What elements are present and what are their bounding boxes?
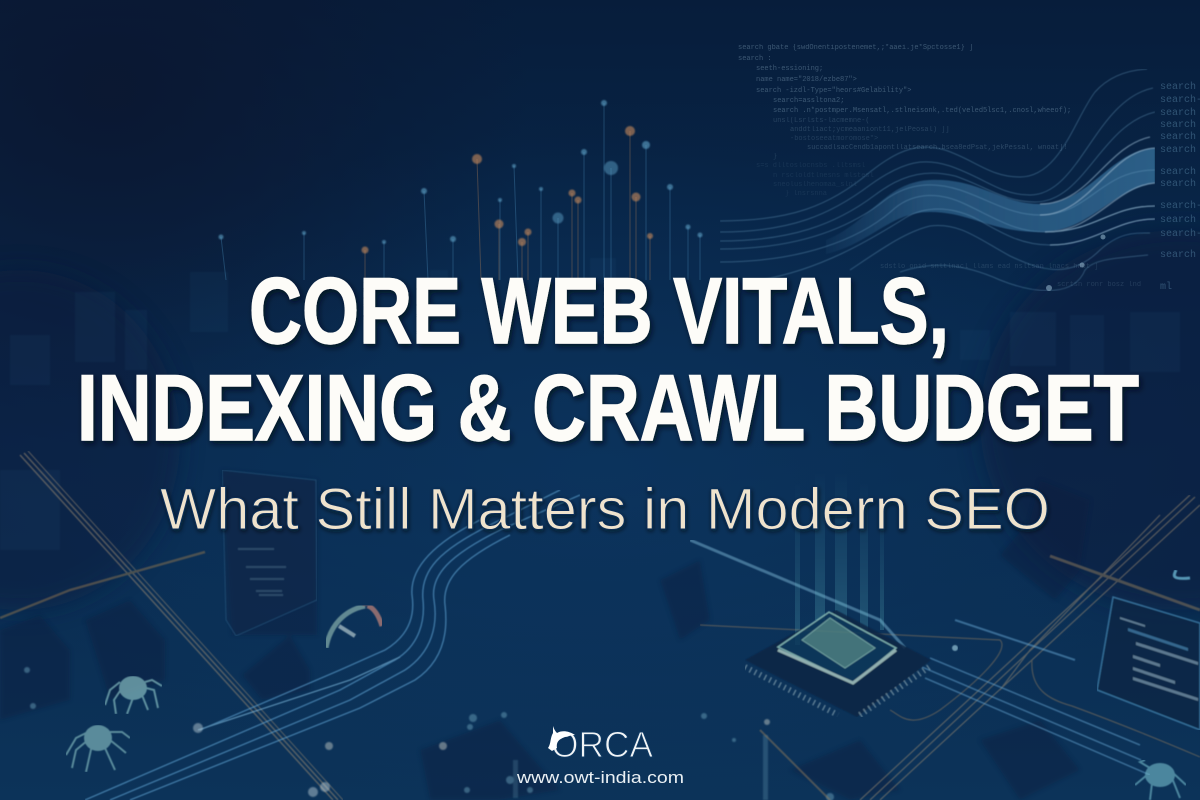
bright stream edges (1040, 137, 1155, 245)
right spider icon (1135, 760, 1186, 800)
code snippet: name name="2018/ezbe87"> (756, 76, 857, 84)
code snippet: search=assltona2; (773, 97, 844, 105)
search labels: search (1160, 214, 1196, 226)
subtitle: What Still Matters in Modern SEO (160, 477, 1050, 542)
search labels: search (1160, 81, 1196, 93)
search labels: search (1160, 166, 1196, 178)
chip pins (745, 665, 932, 715)
code snippet: search -izdl-Type="heors#Gelability"> (756, 87, 911, 95)
code snippet: unsl(Lsrlsts-lacmemne-( (773, 117, 870, 125)
chip lid (778, 612, 896, 683)
code snippet: n rscloldtlnesns mlstesl (773, 172, 874, 180)
left gold diagonal trace (0, 451, 343, 800)
code snippet (738, 44, 1141, 289)
code snippet: succadlsacCendb1apontllatsearch.bsea8edPsat,jekPessal, wnoat]! (807, 144, 1067, 152)
title (77, 258, 1139, 460)
search labels (1160, 81, 1200, 293)
title: CORE WEB VITALS, (249, 258, 949, 363)
right blue traces (690, 540, 1150, 775)
search labels: search (1160, 119, 1196, 131)
search labels: search (1160, 107, 1196, 119)
stream band (826, 148, 1155, 254)
code snippet: sneoluslhenomaa_slnl (773, 181, 857, 189)
icon: orca (548, 726, 575, 751)
code snippet: -bostoseeatmoromose"> (790, 135, 878, 143)
ORCA logo (548, 724, 653, 765)
code snippet: scrtsn ronr bosz lnd (1057, 281, 1141, 289)
network signal lines (221, 103, 700, 280)
code snippet: sdstlo onid snltlnacl llams ead nsltsan lnacs hndt ] (880, 263, 1098, 271)
right code panel (1097, 570, 1200, 730)
code snippet: } (773, 153, 777, 161)
teal nodes bottom (24, 667, 834, 800)
left blue stream (85, 490, 580, 800)
flowing data stream (720, 69, 1155, 291)
code snippet: s=s dlltoslocnsbs .lltsmsl (756, 162, 865, 170)
website url: www.owt-india.com (516, 768, 684, 787)
logo wordmark: ORCA (551, 724, 653, 765)
spider icon upper (105, 676, 162, 714)
code snippet: search gbate {swdOnentipostenemet,;*aaei.je*Spctosse1} ] (738, 44, 973, 52)
left code panel (222, 470, 317, 636)
search labels: ml (1160, 281, 1172, 293)
search labels: search (1160, 131, 1196, 143)
faint city blocks left and right (0, 258, 1180, 550)
network signal nodes (218, 100, 702, 254)
code snippet: anddtliact;ycmeaaniont11,jelPeosal) ]] (790, 126, 950, 134)
spider icon lower (66, 725, 130, 772)
code snippet: search : (738, 55, 772, 63)
dark circuit board blocks (0, 470, 1090, 800)
right gold diagonal traces (700, 495, 1200, 800)
stream end nodes (1046, 234, 1106, 291)
search labels: search (1160, 144, 1196, 156)
glowing chip beams (795, 470, 884, 645)
search labels: search (1160, 249, 1196, 261)
code snippet: seeth-essioning; (756, 65, 823, 73)
speed gauge (326, 606, 382, 648)
code snippet: } lnsrsnna (785, 190, 827, 198)
search labels: search (1160, 178, 1196, 190)
chip base (745, 610, 931, 717)
processor chip (745, 610, 958, 717)
chip core (802, 618, 875, 668)
code snippet: search .n*postmper.Msensatl,.stlneisonk,.ted(veled5lsc1,.cnosl,wheeof); (773, 107, 1071, 115)
